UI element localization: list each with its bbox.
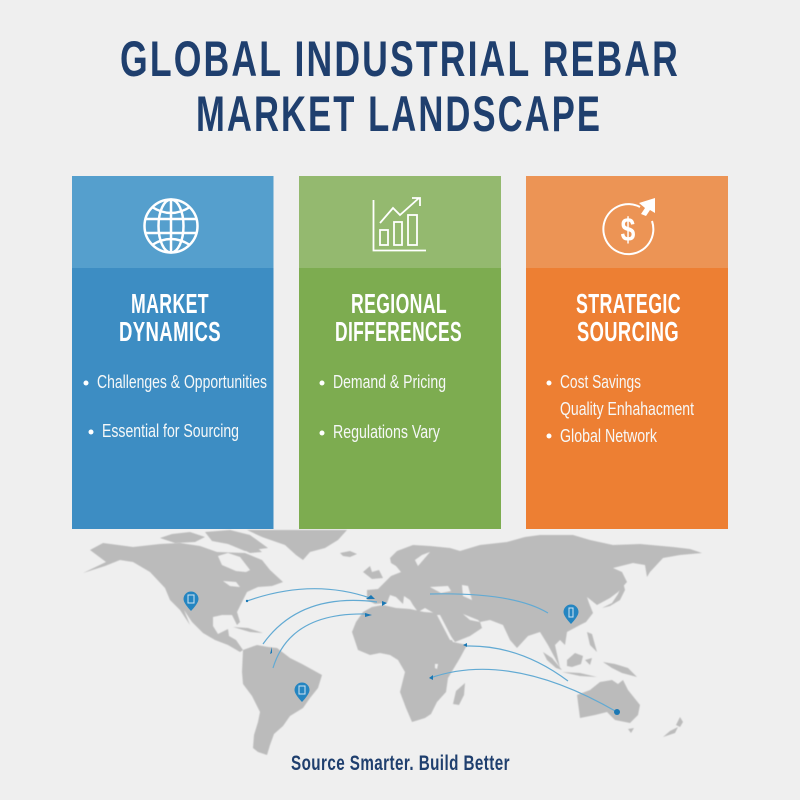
route markers	[246, 595, 620, 715]
pin: North America	[184, 592, 198, 611]
bullet list: regional differences: Regulations Vary	[333, 421, 441, 442]
bullet list: regional differences	[320, 371, 446, 442]
heading: strategic sourcing: STRATEGIC	[576, 288, 681, 319]
arc: South America to Europe	[263, 600, 377, 644]
arc: Brazil to West Africa	[273, 614, 367, 668]
panel: regional differences	[299, 176, 501, 529]
arc: China to Black Sea	[430, 594, 548, 613]
heading: regional differences	[335, 288, 462, 347]
tagline: Source Smarter. Build Better	[291, 752, 510, 775]
map: inland water	[218, 552, 480, 669]
panel: strategic sourcing	[526, 176, 728, 529]
arc: North America to Europe	[247, 589, 370, 601]
pin: China	[564, 605, 578, 624]
title	[120, 31, 680, 142]
bullet list: strategic sourcing: Quality Enhahacment	[560, 398, 694, 419]
map: Iceland	[340, 551, 357, 557]
bullet list: strategic sourcing	[546, 371, 694, 446]
bullet list: regional differences: Demand & Pricing	[333, 371, 446, 392]
bullet list: strategic sourcing: Cost Savings	[560, 371, 641, 392]
arc: Australia to East Africa	[430, 669, 617, 712]
icon: bar chart with arrow	[374, 198, 426, 250]
heading: regional differences: REGIONAL	[351, 288, 447, 319]
panel: market dynamics	[72, 176, 274, 529]
icon: globe	[144, 200, 198, 252]
map: Africa	[352, 605, 467, 722]
world map	[83, 530, 702, 755]
bullet list: market dynamics: Challenges & Opportunities	[97, 371, 267, 392]
map: Eurasia and Europe	[367, 535, 702, 668]
map: islands and Oceania	[363, 556, 683, 737]
heading: market dynamics	[119, 288, 221, 347]
heading: market dynamics: DYNAMICS	[119, 316, 221, 347]
map landmass group	[83, 530, 702, 755]
heading: strategic sourcing	[576, 288, 681, 347]
icon: dollar with arrow: $	[621, 212, 636, 249]
bullet list: market dynamics	[84, 371, 267, 441]
map: North America	[83, 543, 283, 652]
map: Greenland	[247, 530, 347, 560]
map: Arctic islands	[160, 530, 268, 633]
heading: strategic sourcing: SOURCING	[577, 316, 679, 347]
pin: Brazil	[294, 683, 310, 702]
arc: Indonesia to Horn of Africa	[467, 646, 568, 681]
heading: regional differences: DIFFERENCES	[335, 316, 462, 347]
map: South America	[242, 645, 322, 755]
icon: dollar with arrow	[603, 198, 655, 254]
title: MARKET LANDSCAPE	[196, 86, 602, 142]
heading: market dynamics: MARKET	[131, 288, 209, 319]
bullet list: market dynamics: Essential for Sourcing	[102, 420, 239, 441]
bullet list: strategic sourcing: Global Network	[560, 425, 658, 446]
